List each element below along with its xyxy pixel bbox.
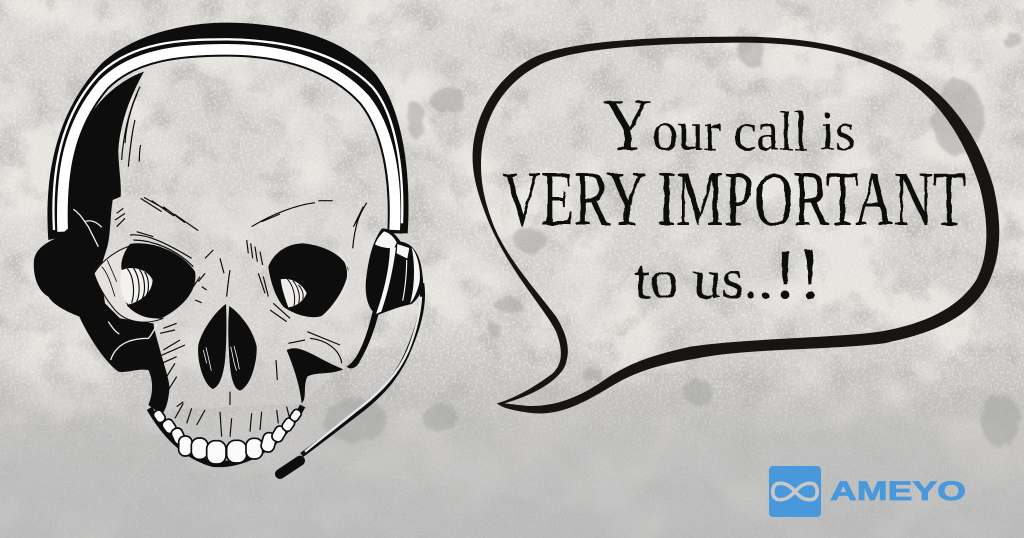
brow and bone hatching	[115, 87, 367, 437]
headset band	[47, 23, 409, 240]
black shaded left side of skull	[34, 72, 169, 415]
right eye socket	[268, 243, 348, 317]
jaw and teeth	[149, 406, 303, 464]
icon: infinity badge	[769, 466, 821, 517]
microphone boom	[280, 283, 423, 474]
skull face highlight	[100, 196, 367, 410]
speech bubble outline	[473, 37, 999, 413]
skull crack lines	[73, 209, 157, 360]
message line: to us..!!: to us..!!	[634, 234, 822, 314]
wordmark: AMEYO	[830, 476, 966, 506]
left eye socket	[94, 243, 195, 322]
speech bubble message	[502, 85, 966, 314]
right earpiece	[347, 229, 423, 368]
Ameyo logo	[769, 466, 966, 517]
nose cavity	[198, 304, 257, 391]
cheekbone shadow right	[287, 348, 343, 403]
message line: Your call is: Your call is	[603, 85, 855, 167]
skull with headset illustration	[34, 23, 423, 474]
